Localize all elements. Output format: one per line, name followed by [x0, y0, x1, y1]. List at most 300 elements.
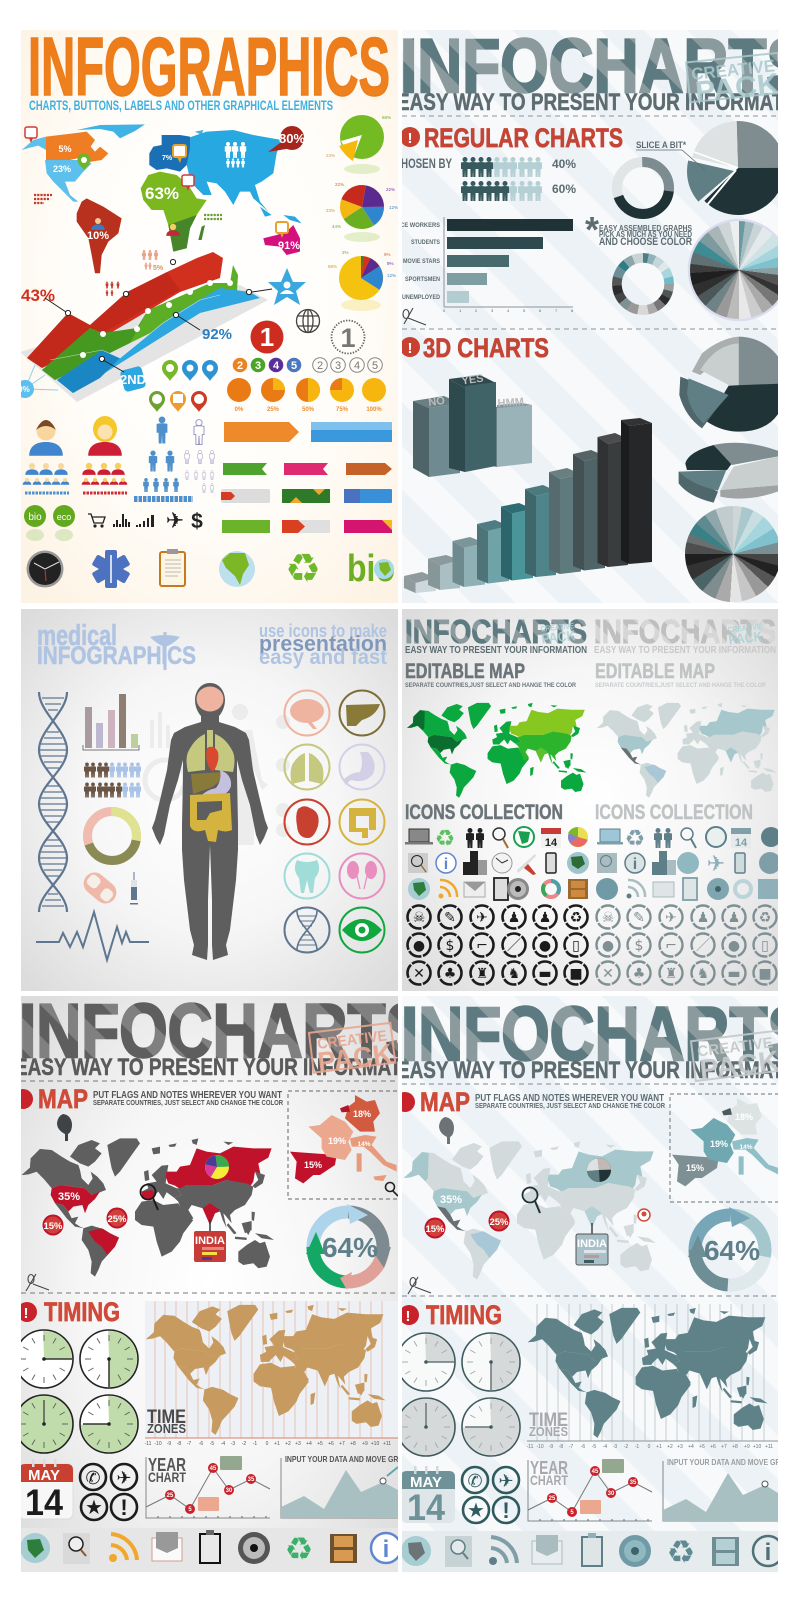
pale icon rows: ✈ [707, 852, 725, 877]
stamp glyphs black [413, 910, 583, 982]
time zones label: ZONES [147, 1421, 186, 1436]
India note [194, 1220, 226, 1262]
colour icon row 3 [408, 878, 588, 900]
heading timing: ! [406, 1308, 410, 1325]
map percentage labels: 63% [145, 184, 179, 203]
stamp glyphs black: ✎ [444, 910, 456, 926]
colour icon row 1 [405, 826, 583, 852]
time zones label [529, 1410, 568, 1439]
map bubble 80% [268, 126, 305, 152]
slogan: easy and fast [259, 646, 387, 669]
chosen by label: CHOSEN BY [394, 155, 452, 171]
horizontal bar chart [387, 217, 574, 313]
stamp glyphs black: ⌐ [476, 938, 488, 954]
time zone scale: -1 [253, 1441, 257, 1447]
progress pie row: 75% [336, 407, 349, 413]
badges bio and eco [24, 505, 75, 541]
male avatar group [23, 420, 69, 493]
stamp glyphs grey: $ [635, 938, 643, 954]
bubble 25% [106, 1208, 128, 1228]
asterisk note [585, 209, 693, 250]
scissors [26, 1274, 49, 1291]
time zone scale: -4 [603, 1444, 607, 1450]
bottom icons [401, 1533, 783, 1571]
world map grey-red [22, 1138, 274, 1277]
stamp glyphs grey [602, 910, 772, 982]
time zone scale: -4 [221, 1441, 225, 1447]
year chart: 35 [248, 1477, 255, 1483]
salmon people 5% [142, 250, 163, 270]
recycle symbol: ♻ [285, 546, 321, 592]
left mini title: INFOCHARTS [405, 613, 587, 650]
callout 0% bubble [21, 364, 58, 398]
small black icons: $ [191, 510, 203, 533]
round icons: ★ [85, 1495, 103, 1519]
map note: SEPARATE COUNTRIES, JUST SELECT AND CHANGE THE COLOR [475, 1101, 665, 1110]
year chart: 25 [549, 1496, 556, 1502]
heading timing [17, 1297, 120, 1327]
pie chart 1 [326, 115, 391, 174]
3D column chart yes no hmm: YES [461, 373, 484, 388]
pie chart 1: 68% [382, 115, 391, 120]
heading regular charts: ! [408, 130, 412, 147]
scissors [403, 308, 426, 325]
round icons: ! [502, 1498, 510, 1523]
green world map [407, 703, 586, 798]
magnifier on map [522, 1188, 540, 1213]
people chart 40%: 40% [552, 157, 576, 171]
inset europe map: 19% [328, 1136, 346, 1146]
time zone scale: +1 [274, 1441, 280, 1447]
panel: medical infographics [21, 609, 398, 991]
blue figure pyramid [134, 416, 193, 499]
inset europe map: 18% [353, 1109, 371, 1119]
time zone scale: +3 [295, 1441, 301, 1447]
stamp glyphs grey: ⌐ [665, 938, 677, 954]
pie chart 2: 12% [389, 205, 398, 210]
year chart: 45 [210, 1466, 217, 1472]
heading 3D charts: ! [408, 340, 412, 357]
stamp: CREATIVE [690, 56, 776, 84]
time zone scale: -11 [527, 1444, 534, 1450]
inset europe map: 18% [735, 1112, 753, 1122]
stamp glyphs grey: ● [602, 938, 614, 954]
heading timing: TIMING [44, 1297, 120, 1327]
bubble 15% [42, 1214, 64, 1236]
year chart: 30 [226, 1488, 233, 1494]
organ icon DNA [284, 908, 330, 952]
time zone scale: +6 [710, 1444, 716, 1450]
time zone scale: +11 [765, 1444, 773, 1450]
callout 92%: 92% [202, 326, 232, 343]
subtitle: EASY WAY TO PRESENT YOUR INFORMATION [15, 1054, 435, 1081]
title infographics: INFOGRAPHICS [37, 642, 196, 670]
horizontal bar chart: 2 [475, 308, 478, 313]
clipboard [160, 549, 185, 586]
time zone scale: -7 [569, 1444, 573, 1450]
3D pie top [679, 337, 788, 432]
asterisk note: EASY ASSEMBLED GRAPHS [599, 224, 693, 233]
outline number dots: 4 [354, 360, 360, 372]
panel: map and timing grey-red [13, 989, 435, 1572]
stamp glyphs black: ▯ [572, 938, 580, 954]
map note: PUT FLAGS AND NOTES WHEREVER YOU WANT [93, 1089, 282, 1101]
pie chart 3: 2% [342, 250, 349, 255]
scissors [408, 1277, 431, 1294]
pie chart 3: 9% [384, 252, 391, 257]
colour number dots: 2 [237, 360, 243, 372]
year chart [528, 1458, 652, 1521]
round icons: ✆ [467, 1471, 483, 1492]
inset europe map: 14% [357, 1141, 371, 1148]
stamp glyphs grey: ♻ [759, 910, 771, 926]
stamp: PACK [694, 68, 781, 109]
bottom icons: ♻ [667, 1533, 695, 1571]
time zone scale: -8 [559, 1444, 563, 1450]
round icons: ! [120, 1495, 128, 1520]
bubble 15% [424, 1218, 446, 1238]
time zone scale: +8 [732, 1444, 738, 1450]
calendar: MAY [410, 1474, 442, 1491]
year chart: CHART [530, 1472, 568, 1488]
panel: map and timing blue-grey [395, 992, 800, 1572]
time zone map [145, 1301, 398, 1438]
time zone scale: +11 [383, 1441, 391, 1447]
India note: INDIA [577, 1238, 607, 1250]
calendar: 14 [407, 1487, 445, 1528]
pills [79, 868, 121, 908]
lungs [186, 730, 234, 772]
globe icon [296, 310, 320, 332]
time zone scale [145, 1441, 391, 1447]
time zone scale: -2 [624, 1444, 628, 1450]
time zone scale: -9 [549, 1444, 553, 1450]
stamp glyphs grey: ♟ [728, 910, 740, 926]
callout 2ND: 2ND [120, 372, 146, 387]
clock 50% [462, 1333, 520, 1391]
slogan: presentation [259, 631, 387, 656]
clock 50% [80, 1330, 138, 1388]
badges bio and eco: eco [57, 512, 71, 522]
pie chart 1: 23% [326, 153, 335, 158]
slice a bit label: SLICE A BIT* [636, 140, 686, 150]
stamp glyphs grey: ♞ [697, 966, 709, 982]
heading 3D charts: 3D CHARTS [423, 333, 549, 363]
time zone scale: -10 [154, 1441, 162, 1447]
stamp glyphs black: ♞ [508, 966, 520, 982]
clock 100% [15, 1395, 73, 1453]
bubble 25%: 25% [107, 1214, 127, 1225]
time zone scale: +9 [744, 1444, 750, 1450]
inset dashed box [288, 1091, 418, 1199]
donut chart [617, 162, 669, 214]
stamp glyphs black: $ [446, 938, 454, 954]
India note: INDIA [195, 1235, 225, 1247]
stamp glyphs black: ♟ [508, 910, 520, 926]
outline figure pyramid [184, 420, 215, 492]
inset europe map [290, 1095, 397, 1183]
panel: infographics colour sheet [16, 20, 398, 603]
bottom icons: i [383, 1536, 389, 1563]
left mini stamp: PACK [541, 627, 576, 647]
calendar [401, 1466, 455, 1528]
horizontal bar chart: 5 [523, 308, 526, 313]
small ribbons row 3 [222, 520, 392, 533]
time zones label [147, 1407, 186, 1436]
liver [191, 772, 223, 794]
colour number dots: 4 [273, 360, 280, 372]
body silhouette [152, 683, 268, 960]
map note: PUT FLAGS AND NOTES WHEREVER YOU WANT [475, 1092, 664, 1104]
organ icon heart [284, 800, 330, 844]
time zone scale: -10 [536, 1444, 544, 1450]
horizontal bar chart: 3 [491, 308, 494, 313]
pale icon rows: ♻ [625, 826, 645, 852]
time zone scale: +8 [350, 1441, 356, 1447]
stamp glyphs grey: ☠ [602, 910, 614, 926]
donut medical [88, 812, 136, 860]
radial pie [690, 221, 788, 319]
radial pie bottom [683, 505, 783, 605]
asterisk note: AND CHOOSE COLOR [599, 236, 692, 248]
time zone scale: 0 [266, 1441, 269, 1447]
map pie marker [211, 1161, 223, 1173]
label 35%: 35% [440, 1194, 462, 1206]
bottom icons: ♻ [285, 1530, 313, 1568]
horizontal bar chart: STUDENTS [411, 239, 440, 246]
time zone scale: -1 [635, 1444, 639, 1450]
bio logo: bio [347, 548, 395, 590]
right mini stamp: PACK [728, 628, 763, 647]
progress pie row: 50% [302, 407, 315, 413]
radial donut [612, 253, 674, 315]
slogan: use icons to make [259, 621, 387, 641]
stamp: CREATIVE [696, 1034, 774, 1061]
left mini subtitle: EASY WAY TO PRESENT YOUR INFORMATION [405, 644, 587, 656]
stamp glyphs black: ✕ [413, 966, 425, 982]
blue star badge [252, 268, 306, 305]
badges bio and eco: bio [28, 512, 42, 523]
time zone scale: -8 [177, 1441, 181, 1447]
year chart: 25 [167, 1493, 174, 1499]
pie chart 2: 44% [332, 224, 341, 229]
horizontal bar chart: SPORTSMEN [405, 276, 440, 283]
clock 100% [397, 1398, 455, 1456]
cycle chart 64% [688, 1207, 765, 1285]
pie chart 3: 12% [387, 273, 396, 278]
time zone scale: -6 [581, 1444, 585, 1450]
world map pale [404, 1141, 656, 1280]
map percentage labels: 91% [278, 240, 300, 252]
stamp glyphs black: ♜ [476, 966, 488, 982]
area chart [281, 1455, 413, 1518]
outline number dots: 5 [372, 360, 378, 372]
large arrow ribbons [224, 422, 392, 442]
year chart: 5 [188, 1507, 192, 1513]
map note [93, 1089, 283, 1107]
colour number dots [233, 358, 301, 372]
map percentage labels: 7% [162, 155, 173, 162]
stamp glyphs grey: ✎ [633, 910, 645, 926]
small ribbons row 1 [223, 463, 392, 475]
area chart: INPUT YOUR DATA AND MOVE GRAPH [285, 1455, 413, 1464]
stamp glyphs black: ▬ [538, 966, 552, 982]
stamp glyphs black: ☠ [413, 910, 425, 926]
bubble 25% [488, 1210, 510, 1232]
asterisk note: PICK AS MUCH AS YOU NEED [599, 230, 692, 239]
organ icon tooth [284, 854, 330, 898]
caduceus icon [150, 632, 180, 670]
stamp glyphs grey: ▯ [761, 938, 769, 954]
time zones label: TIME [147, 1407, 186, 1428]
year chart: 30 [608, 1491, 615, 1497]
pie chart 2: 22% [335, 182, 344, 187]
callout 43% [21, 290, 66, 312]
colour icon row 1: 14 [545, 837, 558, 849]
dot grids and map avatars [34, 195, 222, 236]
stamp [686, 53, 783, 109]
time zone scale: 0 [648, 1444, 651, 1450]
organ icon stomach [340, 744, 384, 790]
colour world map [22, 124, 302, 273]
map pins [25, 127, 288, 238]
small black icons: ✈ [166, 509, 184, 534]
intestines [190, 793, 232, 842]
people rows medical [84, 762, 141, 798]
round icons: ★ [467, 1498, 485, 1522]
outline number dots: 2 [317, 360, 323, 372]
round icons: ✆ [85, 1468, 101, 1489]
round icons: ✈ [116, 1468, 132, 1489]
time zone scale: +6 [328, 1441, 334, 1447]
clock 25% [15, 1330, 73, 1388]
left mini stamp: CREATIVE [540, 621, 575, 634]
time zone scale: -3 [231, 1441, 235, 1447]
time zone scale: +2 [667, 1444, 673, 1450]
people chart 60% [461, 181, 576, 201]
small black icons [88, 512, 202, 530]
heading map: MAP [420, 1087, 470, 1117]
3D column chart yes no hmm [413, 373, 532, 477]
outline number dots: 3 [335, 360, 341, 372]
bottom icon band [402, 1531, 778, 1572]
time zone scale: -7 [187, 1441, 191, 1447]
numbered chart dots [80, 280, 233, 358]
time zone scale: +9 [362, 1441, 368, 1447]
pie chart 3 [328, 250, 396, 311]
heading map [395, 1087, 470, 1117]
exploded pie chart [694, 144, 762, 205]
globe [219, 551, 255, 587]
heading regular charts: REGULAR CHARTS [424, 123, 623, 153]
bottom icons [20, 1530, 401, 1568]
pointer flag [439, 1117, 454, 1144]
bottom icon band [21, 1528, 398, 1572]
stamp glyphs grey: ● [728, 938, 740, 954]
stamp: CREATIVE [316, 1027, 388, 1053]
small red marker [638, 1209, 650, 1221]
time zone scale: +4 [306, 1441, 312, 1447]
DNA helix [39, 692, 67, 912]
inset dashed box [670, 1094, 800, 1202]
year chart: YEAR [530, 1458, 568, 1478]
pale world map [597, 703, 776, 798]
stamp glyphs grey: ▬ [727, 966, 741, 982]
pie chart 3: 68% [328, 264, 337, 269]
horizontal bar chart: MOVIE STARS [403, 258, 440, 265]
time zone scale: +2 [285, 1441, 291, 1447]
map note [475, 1092, 665, 1110]
time zones label: TIME [529, 1410, 568, 1431]
heart [206, 747, 218, 772]
progress pie row [227, 378, 386, 413]
panel: maps and icons collection [402, 609, 781, 991]
stamp [309, 1023, 396, 1079]
time zone map [527, 1304, 778, 1441]
pie chart 2: 23% [326, 208, 335, 213]
time zone scale: -5 [592, 1444, 596, 1450]
editable map heading left: SEPARATE COUNTRIES,JUST SELECT AND HANGE THE COLOR [405, 682, 576, 689]
3D column chart yes no hmm: HMM [497, 396, 524, 410]
stamp glyphs grey: ■ [758, 966, 772, 982]
map note: SEPARATE COUNTRIES, JUST SELECT AND CHANGE THE COLOR [93, 1098, 283, 1107]
colour icon row 2 [408, 851, 589, 875]
India note [576, 1223, 608, 1265]
dotted number 1: 1 [340, 323, 356, 353]
stamp: PACK [698, 1045, 781, 1085]
organ icon lungs [284, 744, 330, 790]
time zone scale: -6 [199, 1441, 203, 1447]
stamp glyphs grey: ／ [696, 938, 710, 954]
3D column chart yes no hmm: NO [428, 395, 446, 409]
bubble 15%: 15% [43, 1221, 63, 1232]
map percentage labels: 23% [53, 164, 71, 174]
inset europe map: 19% [710, 1139, 728, 1149]
stamp: PACK [316, 1038, 394, 1078]
round icons: ✈ [498, 1471, 514, 1492]
horizontal bar chart: OFFICE WORKERS [387, 222, 441, 229]
editable map heading left: EDITABLE MAP [405, 660, 525, 683]
time zone scale: +4 [688, 1444, 694, 1450]
colour number dots: 5 [291, 360, 297, 372]
magnifier on map [140, 1184, 158, 1210]
cycle chart 64% [306, 1204, 391, 1290]
radial pie with ring [689, 220, 789, 320]
time zone scale [527, 1444, 773, 1450]
icons heading left: ICONS COLLECTION [405, 801, 563, 824]
inset europe map [672, 1098, 779, 1186]
stamp icons grey [596, 906, 776, 984]
callout 43%: 43% [21, 286, 55, 305]
people on Asia [225, 142, 246, 168]
callout 92% [178, 316, 232, 339]
map bubble 80%: 80% [279, 131, 305, 146]
stamp glyphs black: ♟ [539, 910, 551, 926]
time zone scale: +10 [371, 1441, 379, 1447]
title: INFOCHARTS [19, 989, 427, 1074]
horizontal bar chart: 0 [443, 308, 446, 313]
map pie marker [593, 1164, 605, 1176]
ghost silhouettes [145, 704, 290, 845]
title: INFOGRAPHICS [28, 20, 390, 113]
time zones label: ZONES [529, 1424, 568, 1439]
editable map heading right: EDITABLE MAP [595, 660, 715, 683]
icons heading right: ICONS COLLECTION [595, 801, 753, 824]
time zone scale: -5 [210, 1441, 214, 1447]
year chart: 45 [592, 1469, 599, 1475]
map percentage labels: 10% [87, 230, 109, 242]
inset magnifier [386, 1182, 398, 1196]
